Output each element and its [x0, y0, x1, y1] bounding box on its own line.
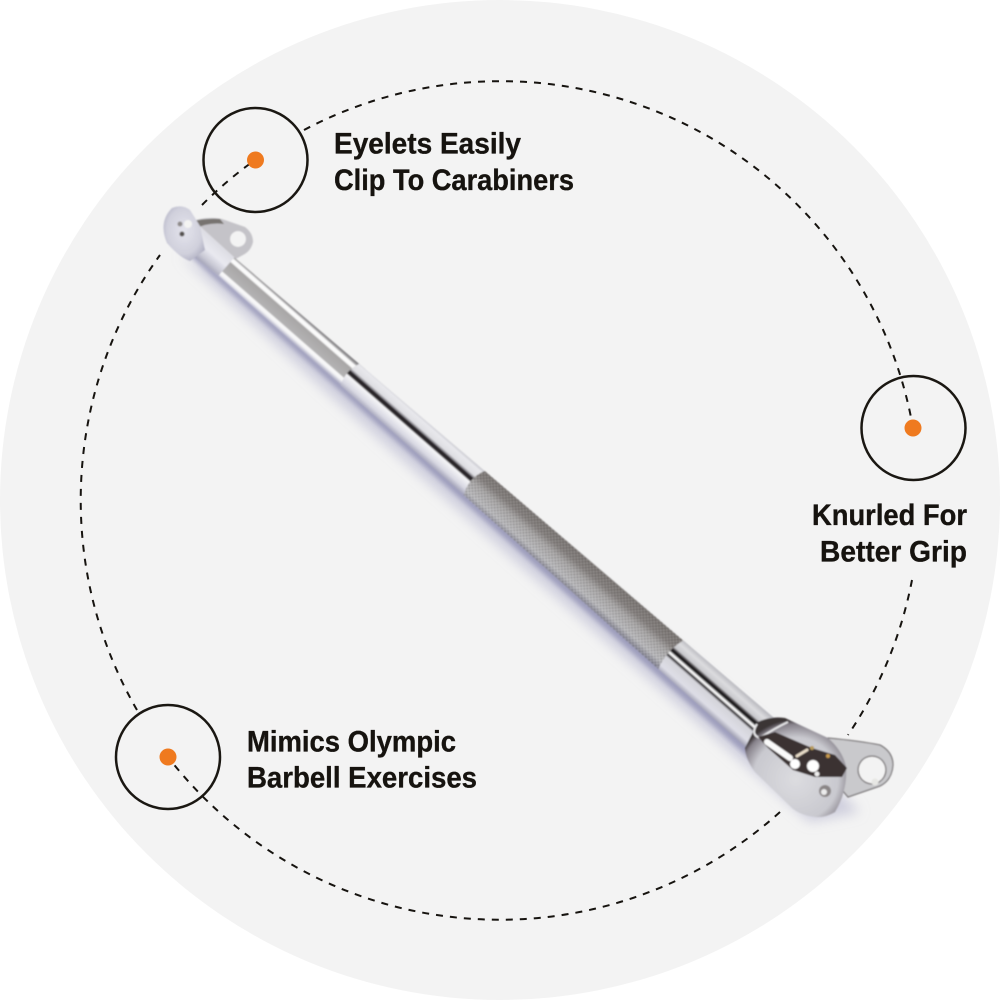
right eyelet shadow inside hole [872, 778, 878, 786]
callout: knurled [862, 376, 966, 480]
label: eyelets: Clip To Carabiners [334, 164, 574, 197]
right eyelet [825, 738, 893, 797]
label: eyelets [334, 128, 574, 197]
left eyelet dark strip [190, 219, 224, 229]
label: knurled: Knurled For [812, 499, 967, 532]
callout: eyelets [204, 108, 308, 212]
right ball cap [745, 718, 846, 817]
label: olympic: Mimics Olympic [247, 726, 456, 758]
label: olympic [247, 726, 477, 794]
label: knurled [812, 499, 967, 568]
left cap [163, 206, 205, 261]
bar shadow [172, 241, 860, 822]
left cap detail [178, 220, 192, 236]
thin knurl section [217, 256, 365, 391]
main knurled grip [459, 466, 691, 676]
dashed connector ring [81, 81, 913, 920]
right cap reflections [758, 732, 847, 797]
middle chrome section [337, 360, 488, 498]
lower chrome section [655, 637, 779, 753]
left eyelet [190, 218, 253, 262]
left cylinder [180, 225, 238, 280]
label: eyelets: Eyelets Easily [334, 128, 521, 160]
barbell bar [163, 206, 893, 817]
callout: olympic [116, 705, 220, 809]
right collar ring [754, 722, 788, 738]
label: knurled: Better Grip [820, 536, 967, 568]
label: olympic: Barbell Exercises [247, 762, 477, 794]
shaft [177, 219, 779, 753]
